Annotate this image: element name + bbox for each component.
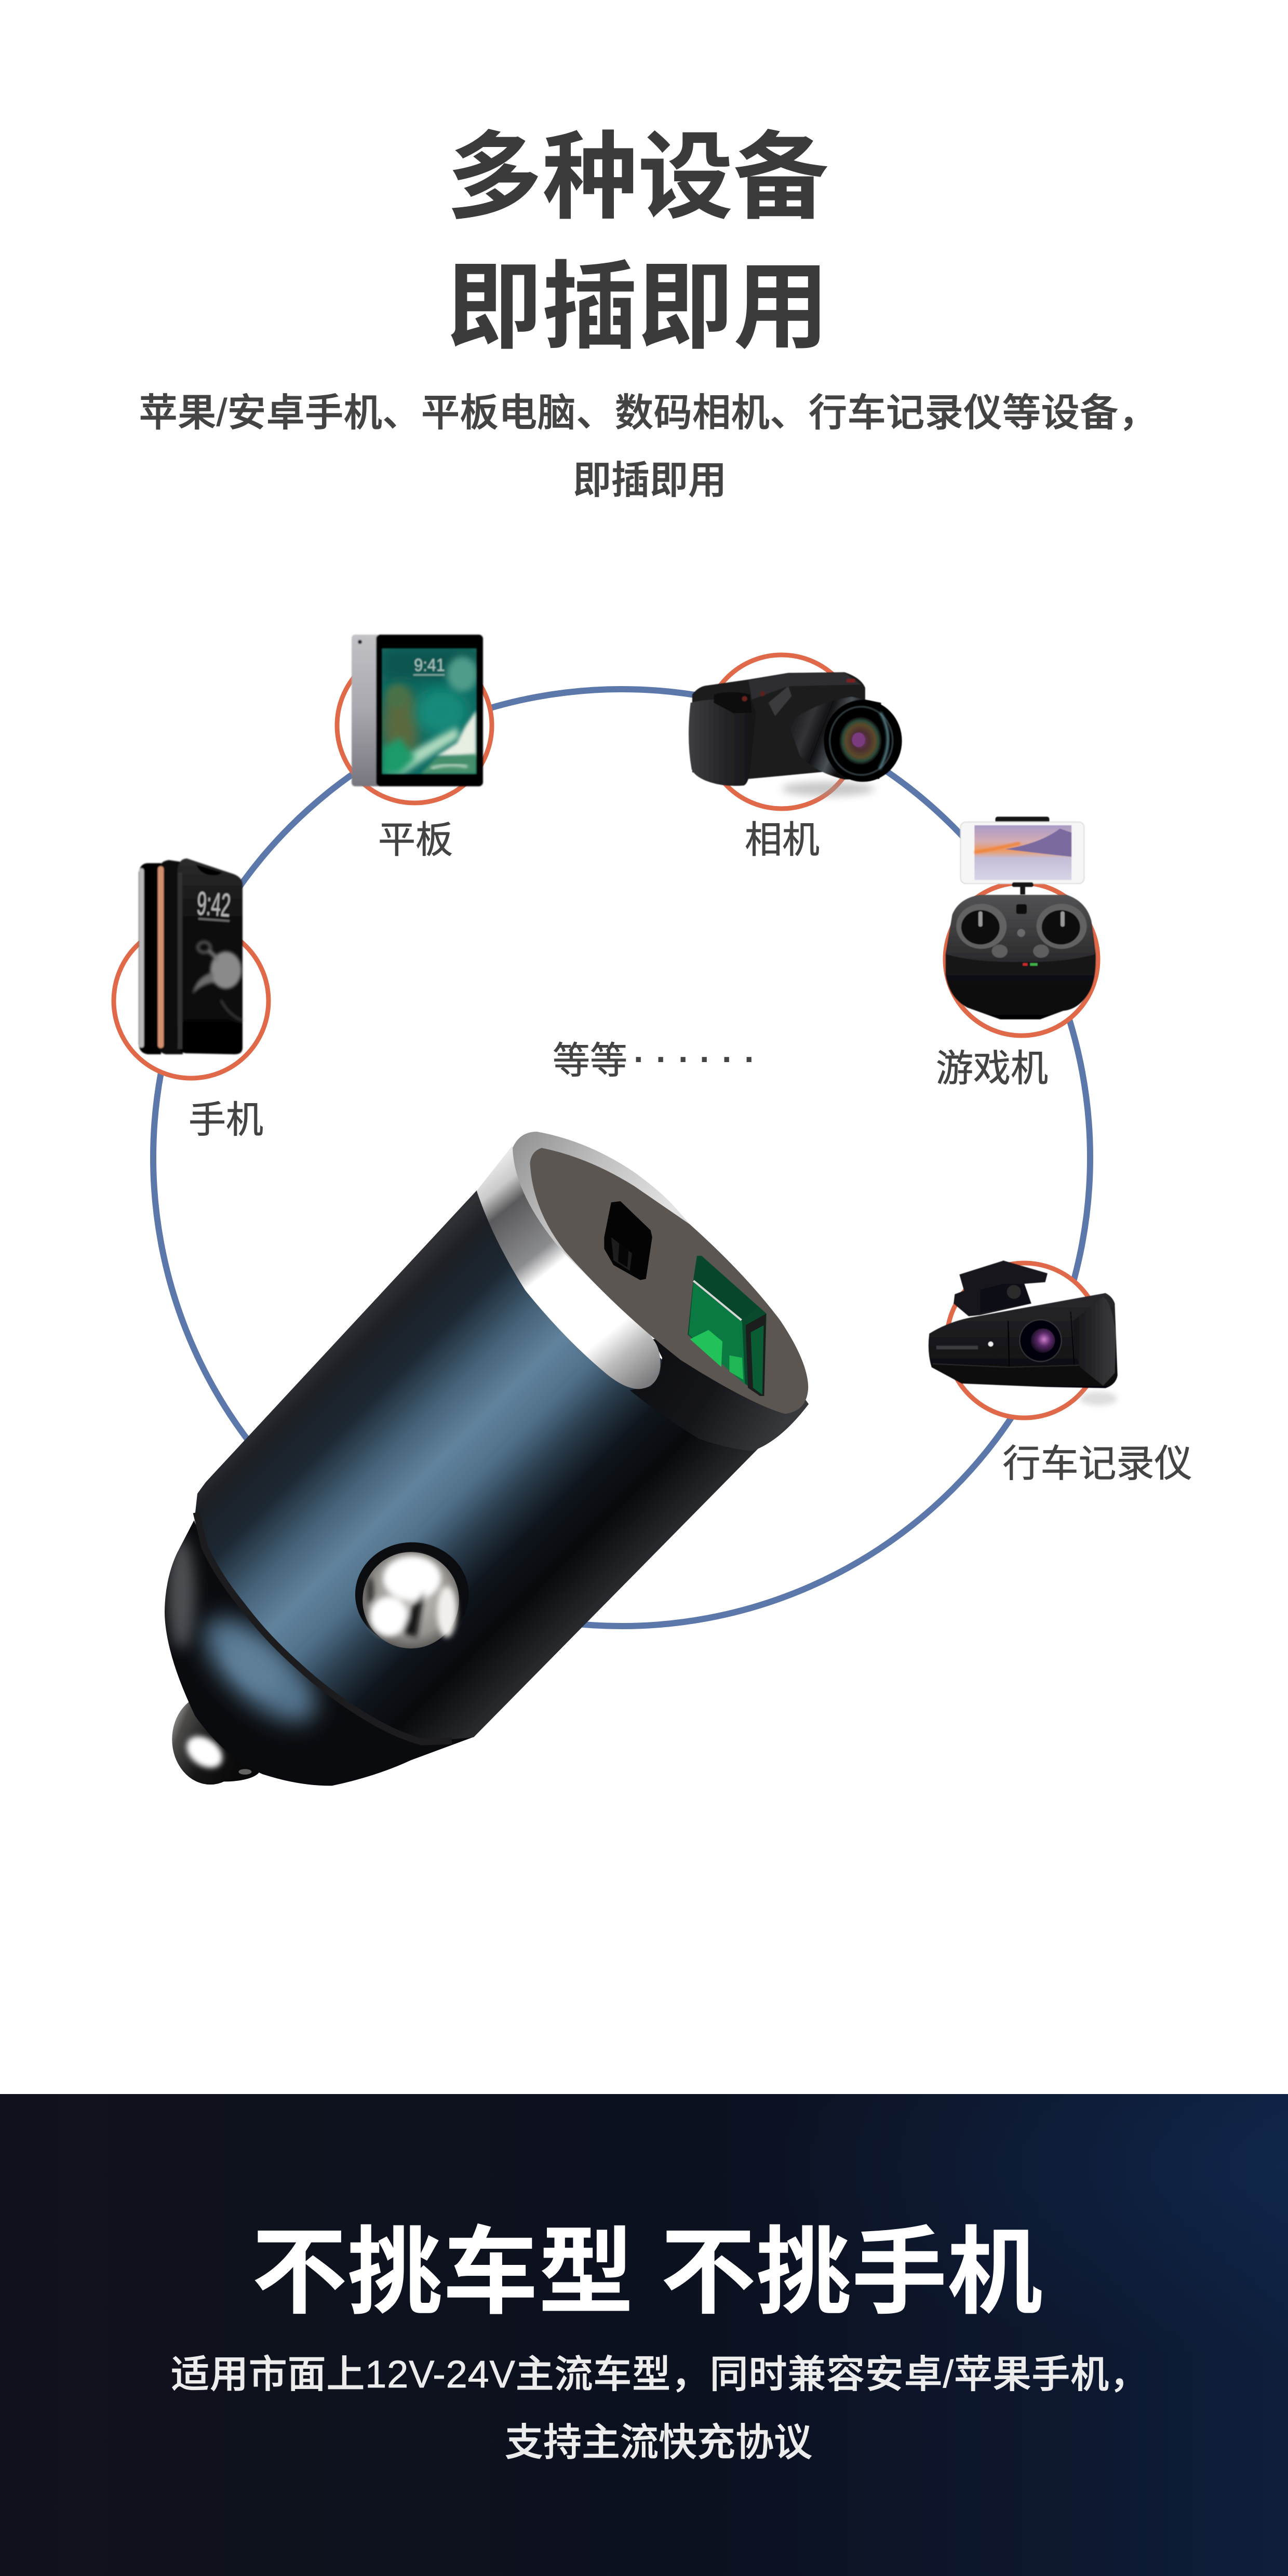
- footer description: 支持主流快充协议: [505, 2421, 812, 2464]
- device: camera: [689, 655, 902, 809]
- footer description: 适用市面上12V-24V主流车型，同时兼容安卓/苹果手机，: [171, 2353, 1148, 2396]
- icon: tablet: 9:41: [414, 655, 445, 675]
- steel band: [477, 1147, 661, 1389]
- description text: 即插即用: [573, 459, 727, 502]
- footer heading: 不挑车型 不挑手机: [251, 2219, 1043, 2326]
- orange ring: tablet: [337, 648, 492, 803]
- device: dashcam: [929, 1260, 1118, 1418]
- label: dashcam: 行车记录仪: [1002, 1443, 1192, 1485]
- label: tablet: 平板: [378, 820, 453, 861]
- product: car charger: [165, 1132, 809, 1786]
- orange ring: phone: [114, 923, 269, 1078]
- orange ring: controller: [945, 883, 1098, 1036]
- usb-a port: [688, 1256, 767, 1396]
- device: game controller: [945, 816, 1098, 1036]
- pin ball: [172, 1694, 260, 1785]
- description text: [139, 391, 1157, 502]
- title: [447, 124, 829, 360]
- orange ring: dashcam: [947, 1263, 1102, 1418]
- device: phone: [114, 858, 269, 1078]
- icon: camera: [689, 672, 902, 796]
- icon: phones: 9:42: [196, 884, 232, 924]
- label: etc: 等等: [553, 1040, 627, 1082]
- icon: game controller: [946, 816, 1096, 1019]
- face plate: [530, 1148, 808, 1414]
- title: 多种设备: [447, 124, 829, 231]
- steel rim: [513, 1132, 699, 1360]
- cap assembly: [477, 1132, 809, 1451]
- contact ball: [355, 1542, 469, 1648]
- icon: tablet: [352, 635, 483, 786]
- description text: 苹果/安卓手机、平板电脑、数码相机、行车记录仪等设备，: [139, 391, 1157, 434]
- label: phone: 手机: [189, 1099, 263, 1141]
- main body: [195, 1190, 759, 1742]
- groove: [196, 1512, 452, 1742]
- orange ring: camera: [705, 655, 858, 809]
- icon: phones: [139, 858, 243, 1054]
- icon: dashcam: [929, 1260, 1118, 1405]
- ellipsis dots: ······: [634, 1040, 756, 1078]
- panel: footer: [0, 2094, 1288, 2576]
- footer description: [171, 2353, 1148, 2464]
- title: 即插即用: [447, 253, 829, 360]
- collar: [629, 1337, 809, 1451]
- label: game console: 游戏机: [936, 1048, 1048, 1090]
- device: tablet: [337, 635, 492, 803]
- label: camera: 相机: [745, 820, 820, 861]
- connection ring: [153, 689, 1090, 1626]
- nose section: [165, 1520, 474, 1786]
- type-c port: [604, 1201, 652, 1280]
